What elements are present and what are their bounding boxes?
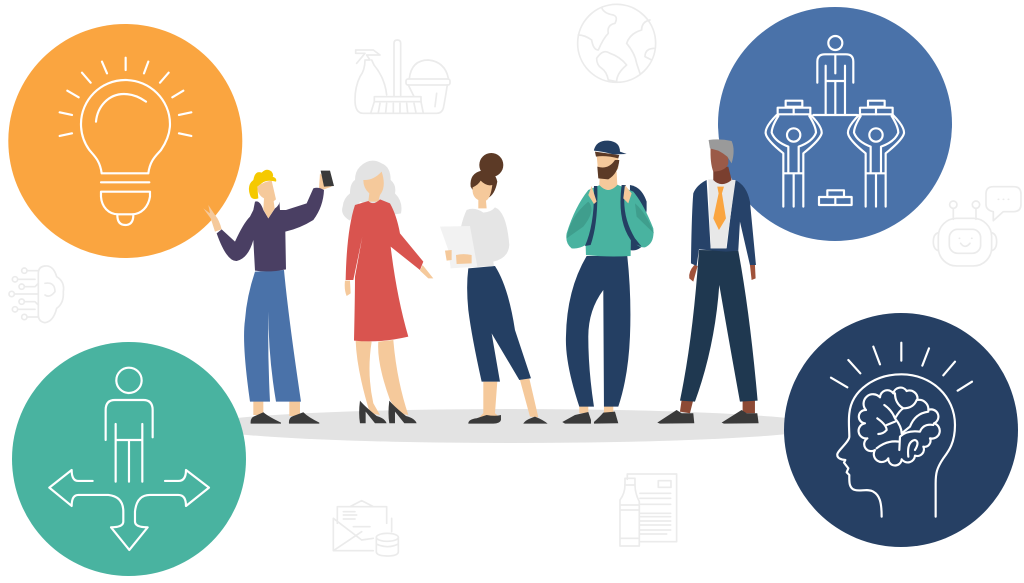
ground shadow <box>200 409 824 443</box>
person: woman in red dress <box>342 161 433 423</box>
icon: cleaning supplies <box>355 40 450 113</box>
person: man with backpack <box>562 141 654 424</box>
icon: bottle and document <box>620 474 677 546</box>
panel: idea lightbulb circle <box>8 24 242 258</box>
icon: lightbulb <box>60 58 191 225</box>
person: man in suit with orange tie <box>657 139 759 424</box>
icon: digital brain <box>9 266 64 323</box>
icon: head with brain <box>831 343 972 517</box>
group of five people <box>203 139 759 424</box>
icon: globe <box>578 4 656 82</box>
panel: choices circle <box>12 342 246 576</box>
panel: mind circle <box>784 313 1018 547</box>
panel: teamwork circle <box>718 7 952 241</box>
person: man with phone <box>203 170 334 424</box>
person: woman with papers <box>440 153 548 424</box>
icon: person at three-way arrows <box>49 368 209 550</box>
icon: envelope with coins <box>333 501 398 556</box>
icon: person standing on lifted platform <box>766 36 904 207</box>
icon: chatbot robot <box>933 187 1021 266</box>
